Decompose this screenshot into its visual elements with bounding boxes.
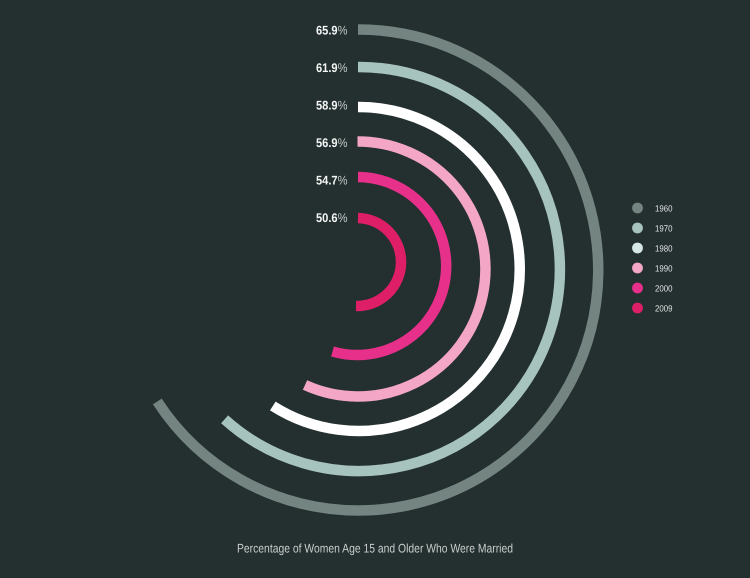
legend item: 2000: 2000 <box>655 284 672 294</box>
arc: 1970 61.9% <box>225 67 560 471</box>
legend item: 1980: 1980 <box>655 244 672 254</box>
arc: 2009 50.6% <box>356 218 401 306</box>
label: 65.9%: 65.9% <box>316 23 348 37</box>
label: 50.6%: 50.6% <box>316 211 348 225</box>
legend <box>632 203 672 314</box>
legend item: 2009: 2009 <box>655 304 672 314</box>
label: 56.9%: 56.9% <box>316 136 348 150</box>
legend item: 1960: 1960 <box>655 204 672 214</box>
label: 54.7%: 54.7% <box>316 173 348 187</box>
radial bar chart <box>157 29 598 510</box>
arc: 1980 58.9% <box>273 107 520 431</box>
arc: 2000 54.7% <box>332 177 446 355</box>
value labels <box>316 23 348 225</box>
legend item: 1990: 1990 <box>655 264 672 274</box>
legend item: 1970: 1970 <box>655 224 672 234</box>
label: 61.9%: 61.9% <box>316 61 348 75</box>
arc: 1990 56.9% <box>305 141 485 396</box>
arc: 1960 65.9% <box>157 29 598 510</box>
caption: Percentage of Women Age 15 and Older Who Were Married <box>237 542 513 556</box>
label: 58.9%: 58.9% <box>316 98 348 112</box>
